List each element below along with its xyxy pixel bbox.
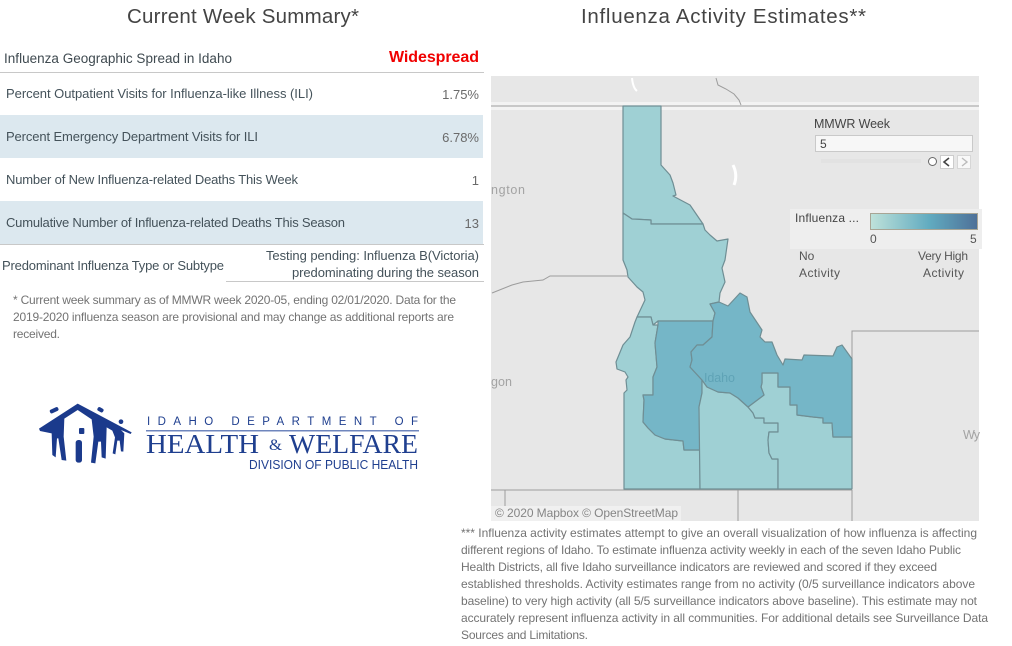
- district: eastern: [690, 293, 852, 437]
- row: emergency department visits: 6.78%: [442, 130, 479, 145]
- title: influenza activity estimates: Influenza Activity Estimates**: [581, 5, 866, 28]
- map: influenza activity by district: [491, 76, 981, 521]
- legend: influenza activity colour scale: No: [799, 249, 815, 263]
- state labels: Wy: [963, 428, 981, 442]
- row: predominant subtype: Testing pending: Influenza B(Victoria): [266, 248, 479, 263]
- legend: influenza activity colour scale: Activity: [799, 266, 840, 280]
- text block: summary footnote: 2019-2020 influenza season are provisional and may change as additional reports are: [13, 310, 454, 324]
- district: southeastern: [748, 373, 852, 489]
- logo text: WELFARE: [289, 429, 418, 459]
- icon: next arrow: [958, 156, 970, 168]
- map attribution: © 2020 Mapbox © OpenStreetMap: [495, 506, 678, 520]
- title: current week summary: Current Week Summary*: [127, 5, 359, 28]
- row: predominant subtype: predominating during the season: [292, 265, 479, 280]
- row: geographic spread: [0, 49, 484, 73]
- text block: activity estimates note: [461, 526, 988, 642]
- text block: activity estimates note: different regions of Idaho. To estimate influenza activity weekly in each of the seven Idaho Public: [461, 543, 961, 557]
- map background: [491, 76, 979, 521]
- district: southwest: [616, 317, 700, 489]
- control: MMWR week filter: 5: [820, 137, 827, 151]
- row: outpatient visits: 1.75%: [442, 87, 479, 102]
- text block: summary footnote: [13, 293, 456, 341]
- logo text: HEALTH: [146, 429, 259, 459]
- icon: previous arrow: [940, 156, 954, 168]
- neighbouring borders: [491, 78, 979, 521]
- row: new deaths: Number of New Influenza-related Deaths This Week: [6, 172, 298, 187]
- row: geographic spread: Influenza Geographic Spread in Idaho: [4, 51, 232, 66]
- row: outpatient visits: [6, 86, 479, 102]
- row: emergency department visits: [0, 115, 483, 158]
- logo text: IDAHO DEPARTMENT OF: [147, 416, 418, 428]
- row: emergency department visits: Percent Emergency Department Visits for ILI: [6, 129, 258, 144]
- logo text: [146, 416, 419, 472]
- row: new deaths: [6, 172, 479, 188]
- logo text: DIVISION OF PUBLIC HEALTH: [249, 458, 418, 472]
- row: cumulative deaths: 13: [465, 216, 479, 231]
- row: geographic spread: Widespread: [389, 49, 479, 66]
- text block: activity estimates note: accurately represent influenza activity in all communities. For additional details see Surveillance Data: [461, 611, 988, 625]
- panel: summary table: [0, 49, 484, 282]
- district: central district: [643, 321, 713, 450]
- text block: summary footnote: received.: [13, 327, 60, 341]
- legend: influenza activity colour scale: Activity: [923, 266, 964, 280]
- icon: house and family: [39, 404, 132, 463]
- label: Idaho: Idaho: [704, 371, 735, 385]
- state labels: [491, 183, 981, 442]
- logo text: &: [269, 437, 283, 454]
- text block: activity estimates note: established thresholds. Activity estimates range from no activity (0/5 surveillance indicators above: [461, 577, 975, 591]
- text block: summary footnote: * Current week summary as of MMWR week 2020-05, ending 02/01/2020. Data for the: [13, 293, 456, 307]
- state labels: ngton: [491, 183, 525, 197]
- text block: activity estimates note: Sources and Limitations.: [461, 628, 588, 642]
- district: panhandle: [623, 106, 703, 224]
- legend: influenza activity colour scale: [790, 209, 982, 280]
- legend: influenza activity colour scale: Very High: [918, 249, 968, 263]
- district: north central: [623, 213, 728, 325]
- control: MMWR week filter: [814, 117, 972, 168]
- row: predominant subtype: [2, 248, 484, 282]
- control: MMWR week filter: MMWR Week: [814, 117, 891, 131]
- legend: influenza activity colour scale: Influenza ...: [795, 211, 859, 225]
- text block: activity estimates note: Health Districts, all five Idaho surveillance indicators are reviewed and scored if they exceed: [461, 560, 937, 574]
- district: south central: [699, 380, 778, 489]
- text block: activity estimates note: baseline) to very high activity (all 5/5 surveillance indicators above baseline). This estimate may not: [461, 594, 978, 608]
- row: cumulative deaths: Cumulative Number of Influenza-related Deaths This Season: [6, 215, 345, 230]
- legend: influenza activity colour scale: 5: [970, 232, 977, 246]
- legend: influenza activity colour scale: 0: [870, 232, 877, 246]
- row: predominant subtype: Predominant Influenza Type or Subtype: [2, 258, 224, 273]
- row: cumulative deaths: [0, 201, 484, 245]
- text block: activity estimates note: *** Influenza activity estimates attempt to give an overall visualization of how influenza is affecting: [461, 526, 977, 540]
- row: outpatient visits: Percent Outpatient Visits for Influenza-like Illness (ILI): [6, 86, 313, 101]
- row: new deaths: 1: [472, 173, 479, 188]
- logo: Idaho Department of Health and Welfare: [39, 404, 419, 472]
- state labels: gon: [491, 375, 512, 389]
